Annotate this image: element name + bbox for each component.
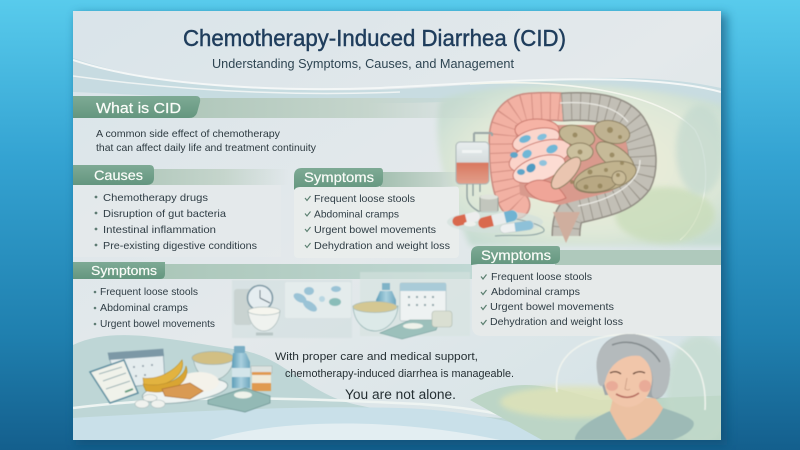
symptoms lower left list: Abdominal cramps	[100, 303, 188, 314]
title: Chemotherapy-Induced Diarrhea (CID)	[183, 25, 566, 51]
symptoms middle list: Frequent loose stools	[314, 193, 415, 205]
colon: grey descending section	[553, 103, 642, 243]
heading ribbon: causes: Causes	[94, 167, 143, 183]
bowl	[192, 352, 234, 380]
garden background behind intestine	[437, 83, 740, 246]
banana	[143, 360, 187, 392]
poster shadow	[76, 14, 727, 445]
symptoms middle list card	[445, 186, 459, 236]
section: causes	[73, 165, 270, 251]
causes list: Chemotherapy drugs	[103, 192, 208, 204]
illustration: colon and intestines	[503, 103, 642, 243]
symptoms right list: Dehydration and weight loss	[490, 316, 623, 328]
face	[604, 351, 652, 407]
heading ribbon: symptoms middle	[294, 168, 465, 190]
illustration: IV bag, pills and tubing	[447, 133, 544, 236]
small intestine: beige spots	[570, 127, 624, 190]
section: what is CID	[73, 96, 440, 153]
tablets	[135, 394, 165, 408]
causes list background	[73, 185, 281, 257]
section: symptoms middle	[294, 168, 459, 251]
section: symptoms lower left	[73, 262, 473, 330]
symptoms right list: Urgent bowel movements	[490, 301, 614, 313]
causes list	[95, 192, 257, 252]
causes list: Disruption of gut bacteria	[103, 208, 226, 220]
reassurance text: With proper care and medical support,	[275, 351, 478, 363]
symptoms middle list: Dehydration and weight loss	[314, 240, 450, 252]
neck and chest	[610, 398, 663, 440]
hair back	[597, 334, 670, 399]
symptoms right list: Frequent loose stools	[491, 271, 592, 283]
sweater	[575, 408, 694, 440]
small intestine: inner fill	[515, 125, 628, 205]
causes list: Pre-existing digestive conditions	[103, 240, 257, 252]
blue bottle	[232, 346, 250, 388]
illustration: bowl, bottle, calendar and notebook	[353, 272, 470, 339]
small intestine: beige loops	[550, 119, 638, 194]
definition text: A common side effect of chemotherapy	[96, 128, 281, 140]
heading ribbon: what is CID: What is CID	[96, 100, 181, 117]
cheeks	[606, 381, 618, 391]
small intestine: pink loops with blue spots	[505, 119, 575, 202]
heading ribbon: causes	[73, 165, 288, 185]
top swoosh background	[73, 58, 721, 106]
reassurance text: chemotherapy-induced diarrhea is manageable.	[285, 368, 514, 380]
symptoms right list card	[472, 265, 721, 336]
subtitle: Understanding Symptoms, Causes, and Management	[212, 56, 514, 71]
heading ribbon: what is CID	[73, 96, 440, 118]
heading ribbon: symptoms right	[471, 246, 721, 265]
portrait: smiling older woman	[557, 334, 705, 440]
symptoms lower left list: Urgent bowel movements	[100, 319, 215, 330]
symptoms lower left list: Frequent loose stools	[100, 287, 198, 298]
illustration: clock, bowl and microbes	[232, 280, 352, 338]
plate	[142, 379, 228, 404]
toast	[162, 383, 203, 399]
orange pill jar	[251, 366, 272, 391]
heading ribbon: symptoms lower left: Symptoms	[91, 263, 158, 278]
definition text: that can affect daily life and treatment continuity	[96, 142, 317, 154]
causes list: Intestinal inflammation	[103, 224, 216, 236]
heading ribbon: symptoms lower left	[73, 262, 473, 279]
eyes, nose, mouth	[610, 372, 645, 374]
colon: pink ascending section	[503, 106, 562, 205]
symptoms middle list: Urgent bowel movements	[314, 224, 436, 236]
section: symptoms right	[471, 246, 721, 336]
calendar	[108, 349, 165, 388]
heading ribbon: symptoms middle: Symptoms	[304, 169, 374, 185]
rice	[179, 372, 219, 392]
medicine box	[208, 388, 270, 412]
notebook	[90, 360, 138, 403]
hair front	[596, 334, 670, 398]
symptoms middle list: Abdominal cramps	[314, 208, 399, 220]
lower wave background	[73, 335, 721, 440]
you are not alone: You are not alone.	[345, 387, 456, 402]
symptoms middle list	[305, 193, 450, 252]
symptoms lower left list	[94, 287, 215, 330]
closing message	[275, 351, 514, 402]
symptoms right list: Abdominal cramps	[491, 286, 580, 298]
heading ribbon: symptoms right: Symptoms	[481, 247, 551, 263]
symptoms right list	[481, 271, 623, 328]
illustration: bland food, calendar and medicine	[90, 346, 272, 412]
